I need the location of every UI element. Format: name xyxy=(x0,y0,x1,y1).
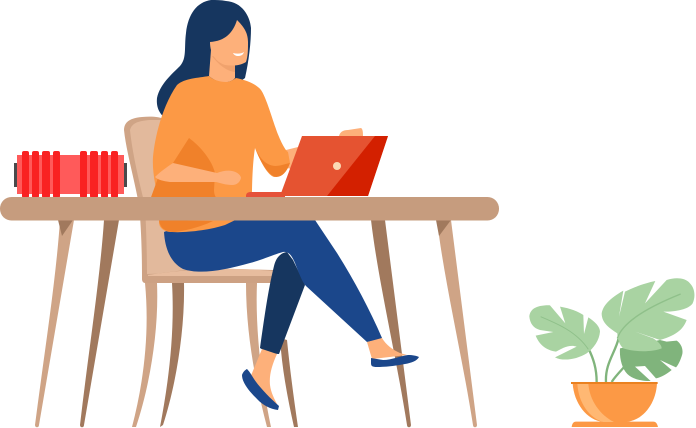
chair backrest xyxy=(124,117,225,278)
sleeve shadow xyxy=(255,148,290,177)
laptop logo xyxy=(333,162,341,170)
hair xyxy=(157,0,251,118)
pot rim xyxy=(571,382,658,384)
sweater shadow at waist xyxy=(150,138,218,200)
laptop xyxy=(246,136,388,197)
pot highlight xyxy=(577,383,614,422)
left foot xyxy=(250,349,278,406)
chair seat xyxy=(142,268,273,283)
smile xyxy=(233,52,244,56)
chair front legs xyxy=(132,283,271,427)
neck xyxy=(209,50,235,82)
right table leg, behind the woman xyxy=(371,220,411,427)
hand behind laptop xyxy=(339,128,363,137)
neck shadow xyxy=(212,56,235,72)
sweater xyxy=(153,76,290,232)
pot bowl xyxy=(573,383,657,422)
laptop base xyxy=(246,192,285,197)
left leaf vein xyxy=(541,317,588,349)
book bands xyxy=(22,151,118,198)
near arm xyxy=(155,163,241,185)
jeans back leg xyxy=(260,252,305,354)
books xyxy=(14,151,127,198)
stems xyxy=(588,338,626,382)
big leaf vein xyxy=(617,294,681,338)
book body xyxy=(17,155,124,194)
pot base xyxy=(572,422,658,427)
book ends xyxy=(14,163,17,187)
dark leaf xyxy=(620,340,683,381)
left shoe xyxy=(242,369,279,410)
big leaf xyxy=(602,278,694,351)
table top xyxy=(0,197,499,220)
table leg: back left xyxy=(80,220,119,427)
left leaf xyxy=(529,305,600,360)
table xyxy=(0,197,499,427)
laptop lid xyxy=(280,136,388,196)
laptop lid shading xyxy=(327,136,388,196)
far hand on keyboard xyxy=(286,147,298,170)
right foot xyxy=(367,338,407,359)
chair xyxy=(124,117,298,427)
table leg: front left xyxy=(35,220,74,427)
right shoe xyxy=(371,355,419,367)
chair back legs xyxy=(160,283,298,427)
woman xyxy=(150,0,419,410)
potted plant xyxy=(529,278,694,427)
table leg: front right xyxy=(437,220,477,427)
jeans front leg xyxy=(164,220,382,342)
face xyxy=(210,20,248,66)
